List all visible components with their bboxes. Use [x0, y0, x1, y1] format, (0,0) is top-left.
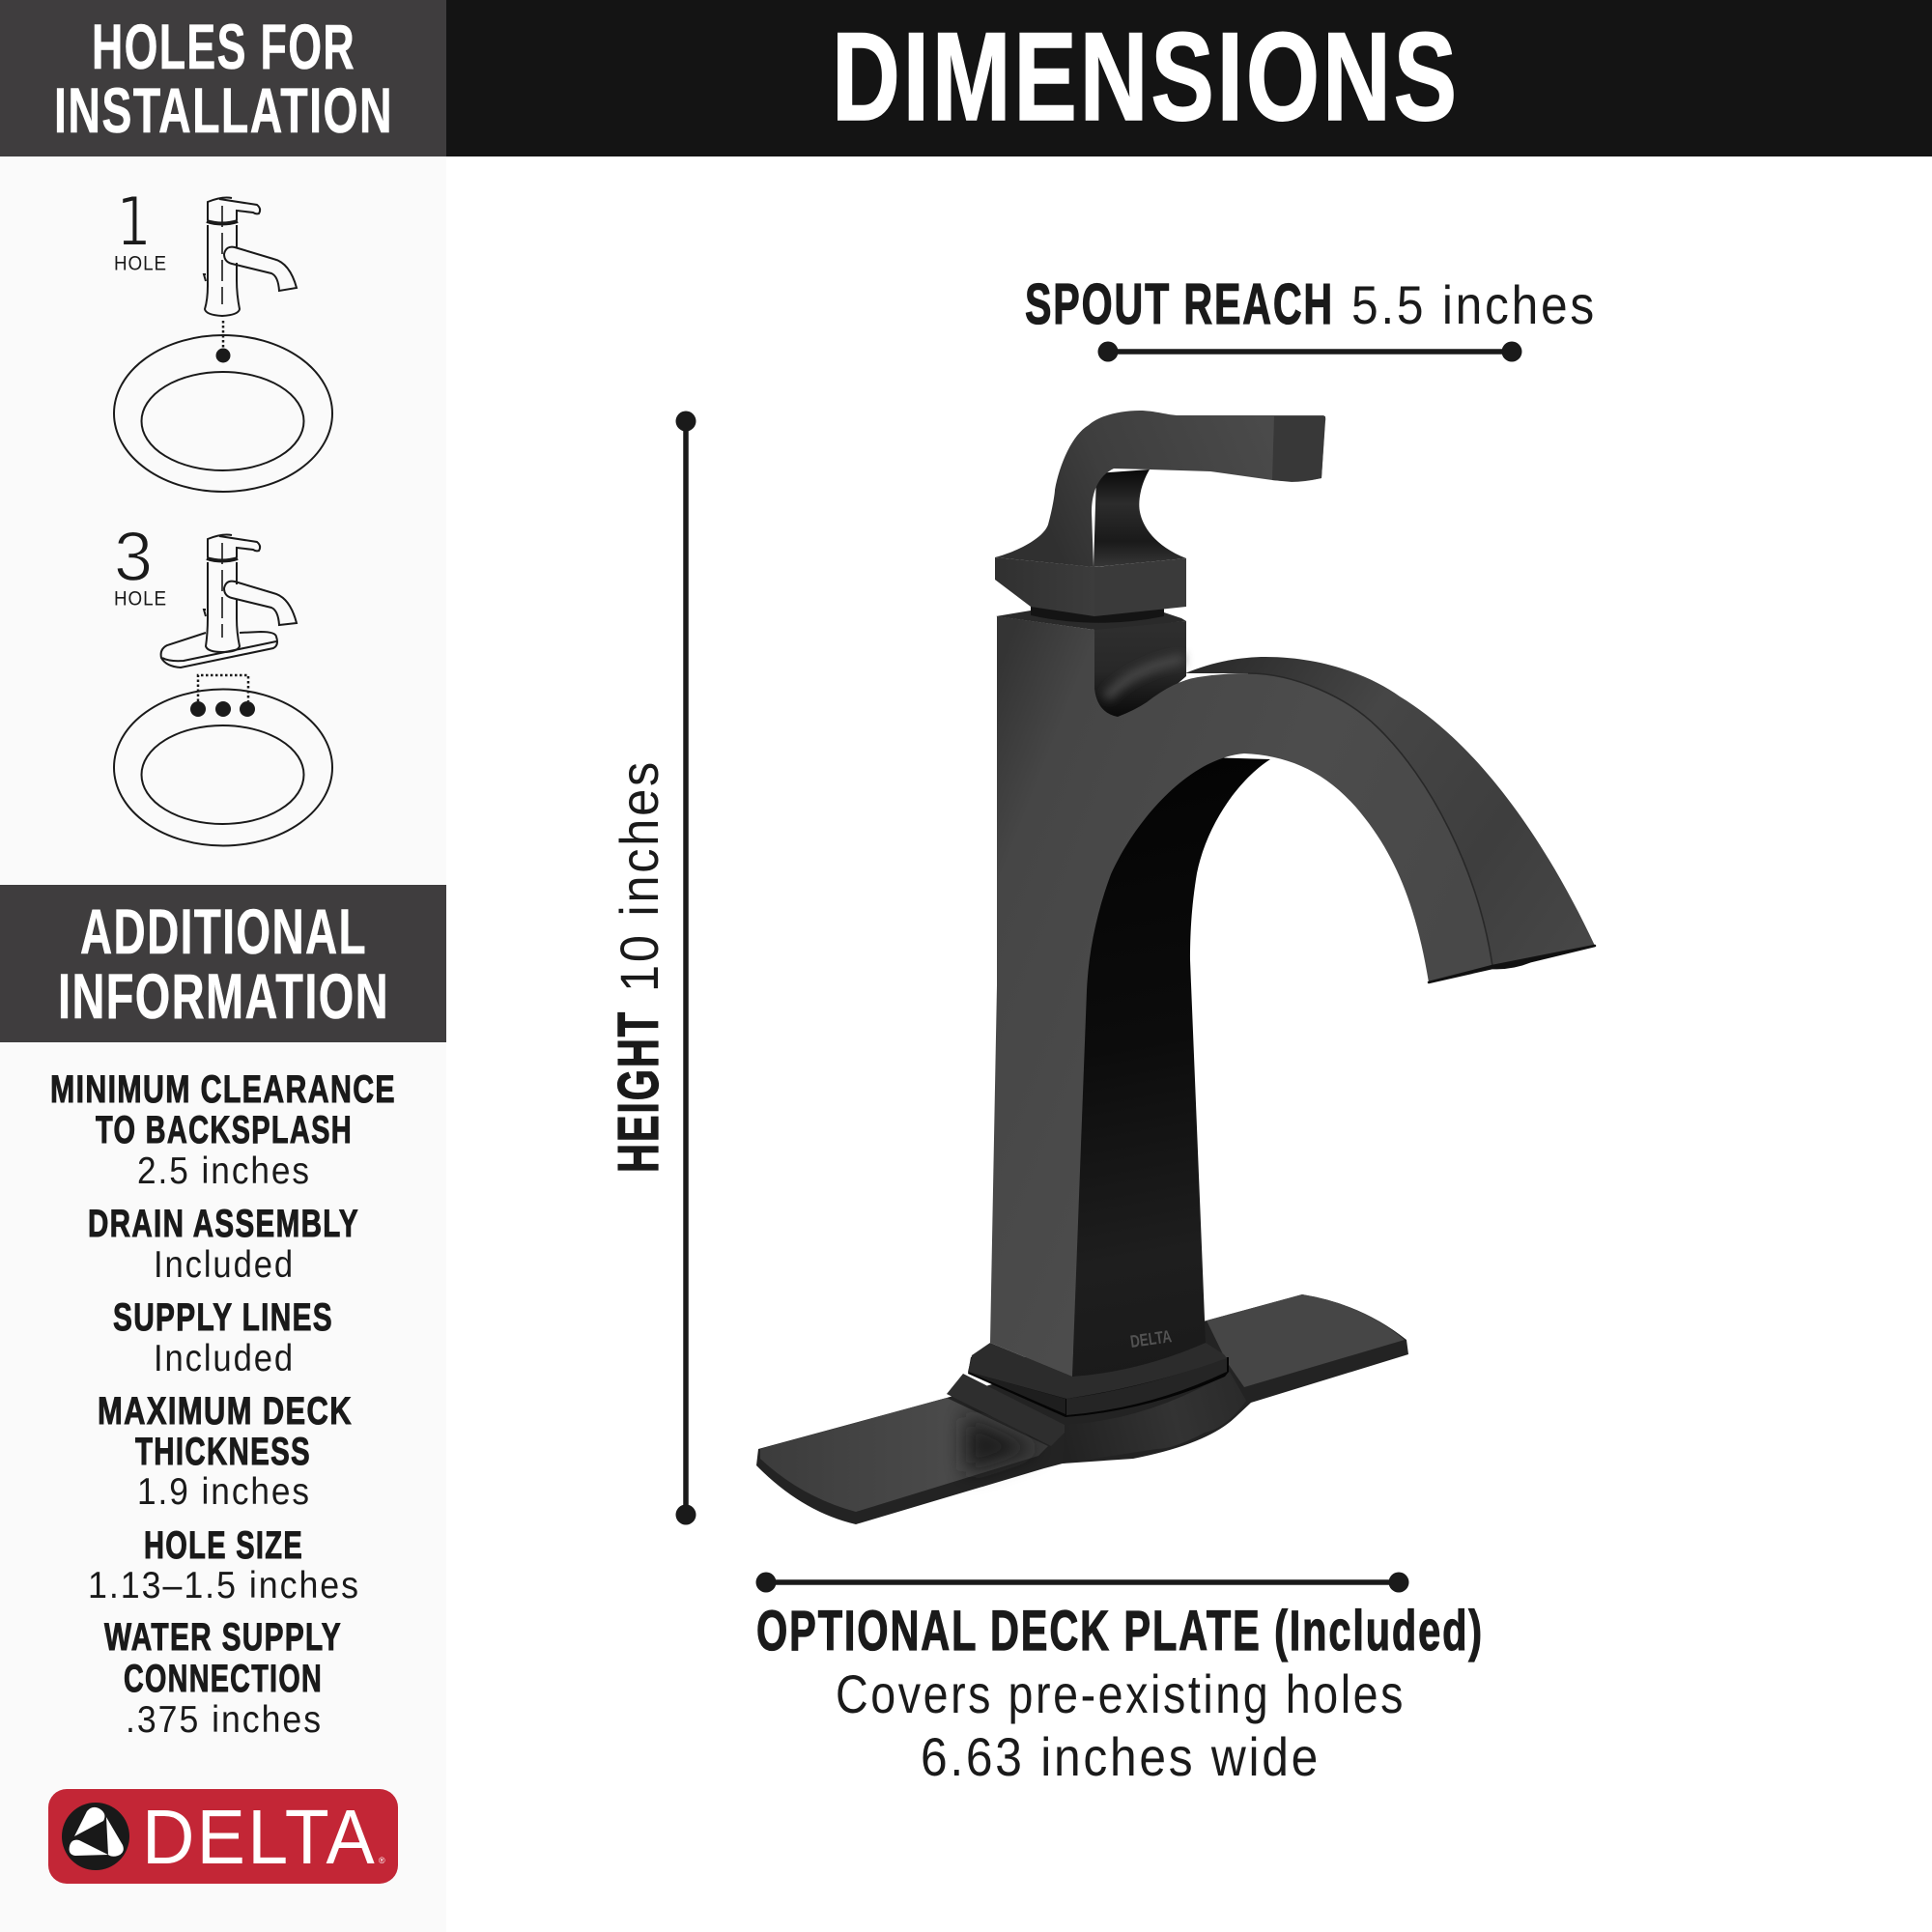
faucet front face and spout: [990, 616, 1492, 1377]
label: 1 hole: 1: [116, 183, 152, 262]
text block: water supply connection: [104, 1616, 342, 1741]
text block: drain assembly: Included: [154, 1244, 295, 1286]
sidebar background: [0, 0, 446, 1932]
text block: hole size: 1.13–1.5 inches: [88, 1565, 360, 1606]
plate shadow: [966, 1415, 1038, 1473]
text block: minimum clearance: [50, 1068, 396, 1192]
spout ridge line: [1248, 673, 1492, 966]
text block: drain assembly: [88, 1203, 359, 1286]
left sidebar panel: [0, 0, 446, 1932]
text block: water supply connection: .375 inches: [126, 1699, 323, 1741]
faucet illustration: [756, 411, 1595, 1524]
icon: sink basin with three holes: [114, 675, 332, 846]
text block: supply lines: Included: [154, 1338, 295, 1379]
text block: drain assembly: DRAIN ASSEMBLY: [88, 1203, 359, 1245]
label: 3 hole: 3: [114, 519, 153, 596]
text block: maximum deck thickness: THICKNESS: [135, 1431, 311, 1473]
text block: maximum deck thickness: MAXIMUM DECK: [98, 1390, 353, 1433]
faucet base collar: [968, 1343, 1229, 1417]
label: 3 hole: HOLE: [114, 587, 167, 611]
faucet rear column: [1072, 753, 1270, 1377]
dimension: optional deck plate: [755, 1573, 1484, 1787]
handle end face: [1272, 416, 1325, 481]
heading: additional information: [0, 885, 446, 1042]
text block: water supply connection: WATER SUPPLY: [104, 1616, 342, 1659]
logo: Delta: [48, 1789, 398, 1884]
text block: minimum clearance: TO BACKSPLASH: [96, 1109, 353, 1151]
logo: Delta: DELTA: [142, 1794, 377, 1880]
text block: water supply connection: CONNECTION: [124, 1658, 323, 1700]
heading: holes for installation: [0, 0, 446, 156]
dimension: height: [607, 412, 696, 1524]
faucet handle: [995, 411, 1325, 630]
handle inner recess: [1094, 469, 1186, 567]
spout outer surface: [1185, 657, 1595, 966]
text block: supply lines: SUPPLY LINES: [113, 1296, 333, 1339]
label: 1 hole: HOLE: [114, 253, 167, 274]
right plate top face: [1207, 1294, 1405, 1387]
dimension: height: HEIGHT: [607, 1010, 670, 1173]
dimension: spout reach: SPOUT REACH: [1025, 272, 1334, 336]
left plate top face: [760, 1398, 1048, 1512]
cartridge ring: [996, 611, 1186, 630]
icon: single-hole faucet line drawing: [204, 197, 297, 316]
heading: holes for installation: INSTALLATION: [54, 74, 393, 146]
dimension: optional deck plate: 6.63 inches wide: [921, 1726, 1321, 1787]
handle base right face: [1094, 558, 1186, 616]
handle base left face: [995, 557, 1094, 616]
dimension: optional deck plate: Covers pre-existing holes: [836, 1663, 1406, 1724]
icon: sink basin with one hole: [114, 321, 332, 492]
icon: faucet with deck plate line drawing: [161, 535, 297, 668]
diagram: 1 hole installation: [114, 183, 332, 492]
label: 3 hole: [114, 519, 167, 611]
handle front: [995, 411, 1325, 567]
text block: hole size: HOLE SIZE: [144, 1524, 303, 1567]
dimension: spout reach: 5.5 inches: [1351, 274, 1597, 335]
logo: Delta: ®: [379, 1856, 385, 1865]
text block: hole size: [88, 1524, 360, 1606]
faucet neck under handle: [1094, 621, 1186, 724]
faucet base skirt: [947, 1372, 1246, 1463]
heading bar: dimensions: DIMENSIONS: [832, 6, 1460, 147]
dimension: spout reach: [1025, 272, 1597, 361]
deck plate: [756, 1294, 1408, 1524]
heading bar: dimensions: [446, 0, 1932, 156]
heading: holes for installation: HOLES FOR: [92, 11, 355, 82]
heading: additional information: ADDITIONAL: [80, 895, 367, 967]
heading: additional information: INFORMATION: [58, 960, 389, 1032]
label: 1 hole: [114, 183, 167, 274]
text block: maximum deck thickness: [98, 1390, 353, 1513]
dimension: optional deck plate: OPTIONAL DECK PLATE (Included): [756, 1600, 1484, 1662]
text block: maximum deck thickness: 1.9 inches: [137, 1471, 311, 1513]
faucet brand mark: DELTA: [1129, 1326, 1173, 1351]
dimension: height: 10 inches: [609, 759, 669, 992]
text block: minimum clearance: 2.5 inches: [137, 1151, 311, 1192]
spout tip underside: [1429, 946, 1595, 982]
diagram: 3 hole installation: [114, 519, 332, 846]
text block: minimum clearance: MINIMUM CLEARANCE: [50, 1068, 396, 1111]
text block: supply lines: [113, 1296, 333, 1379]
